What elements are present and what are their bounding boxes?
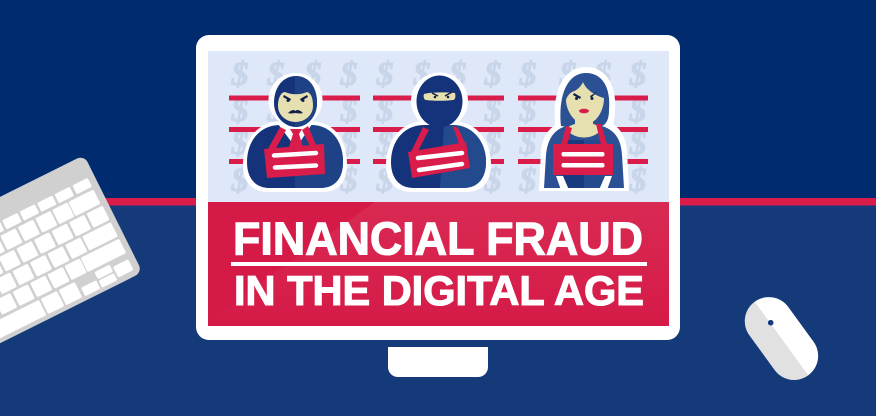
dollar sign pattern: $ — [518, 162, 536, 199]
dollar sign pattern: $ — [484, 56, 502, 93]
monitor screen — [208, 51, 669, 203]
dollar sign pattern: $ — [628, 56, 646, 93]
dollar sign pattern: $ — [230, 92, 248, 129]
monitor frame — [196, 35, 680, 340]
suspect: woman — [539, 67, 629, 191]
dollar sign pattern: $ — [628, 92, 646, 129]
dollar sign pattern: $ — [558, 56, 576, 93]
dollar sign pattern: $ — [518, 92, 536, 129]
title divider — [231, 262, 647, 266]
dollar sign pattern: $ — [628, 162, 646, 199]
dollar sign pattern: $ — [266, 56, 284, 93]
dollar sign pattern: $ — [376, 92, 394, 129]
sign — [408, 142, 470, 178]
title banner — [208, 202, 669, 326]
dollar sign pattern: $ — [376, 56, 394, 93]
dollar sign pattern: $ — [376, 162, 394, 199]
dollar sign pattern: $ — [448, 56, 466, 93]
dollar sign pattern: $ — [340, 92, 358, 129]
dollar sign pattern: $ — [412, 56, 430, 93]
icon: mouse — [735, 288, 828, 389]
dollar sign pattern: $ — [230, 56, 248, 93]
dollar sign pattern: $ — [230, 162, 248, 199]
dollar sign pattern: $ — [594, 56, 612, 93]
dollar sign pattern: $ — [304, 56, 322, 93]
height chart lines — [229, 96, 648, 164]
suspect: masked robber — [386, 72, 491, 192]
monitor stand — [388, 347, 488, 377]
sign — [553, 144, 613, 175]
dollar sign pattern: $ — [376, 125, 394, 162]
dollar sign pattern: $ — [484, 92, 502, 129]
dollar sign pattern: $ — [340, 162, 358, 199]
dollar sign pattern: $ — [518, 125, 536, 162]
dollar sign pattern: $ — [518, 56, 536, 93]
title line 2: IN THE DIGITAL AGE — [234, 267, 644, 314]
dollar sign pattern — [230, 56, 646, 199]
title line 1: FINANCIAL FRAUD — [233, 212, 643, 264]
sign — [264, 144, 325, 178]
dollar sign pattern: $ — [340, 125, 358, 162]
suspect: man with moustache — [243, 73, 347, 192]
dollar sign pattern: $ — [340, 56, 358, 93]
dollar sign pattern: $ — [266, 92, 284, 129]
dollar sign pattern: $ — [484, 125, 502, 162]
dollar sign pattern: $ — [628, 125, 646, 162]
icon: keyboard — [0, 155, 142, 415]
dollar sign pattern: $ — [230, 125, 248, 162]
dollar sign pattern: $ — [484, 162, 502, 199]
